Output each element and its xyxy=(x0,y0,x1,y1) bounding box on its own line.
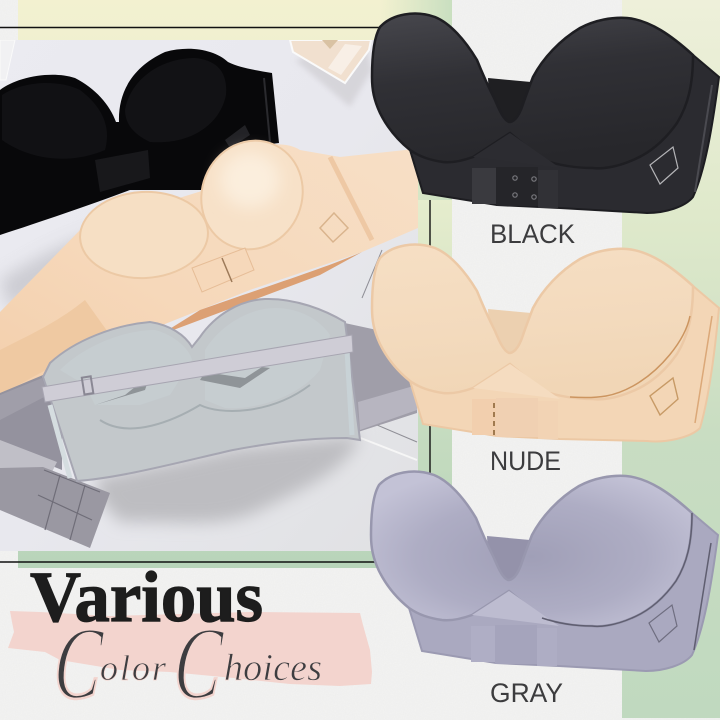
shadow under gray bra xyxy=(95,435,360,523)
panel: gradient block behind the photo xyxy=(18,0,452,568)
subtitle: Color Choices: olor xyxy=(100,648,167,688)
subtitle: Color Choices xyxy=(50,607,322,720)
clear strap xyxy=(42,335,353,402)
logo mark xyxy=(650,378,678,415)
label: BLACK: BLACK xyxy=(490,219,575,249)
black bra xyxy=(0,49,279,235)
pink brush stroke xyxy=(8,611,372,686)
label: NUDE: NUDE xyxy=(490,446,561,476)
frame: thin black rule xyxy=(0,28,430,562)
title: Various: Various xyxy=(30,557,263,637)
product: nude bra xyxy=(372,245,719,441)
logo on nude bra xyxy=(320,213,348,242)
shadow under nude bra xyxy=(0,236,73,305)
logo mark xyxy=(650,147,678,184)
product: gray bra xyxy=(371,472,718,671)
photo: flat lay of three bras xyxy=(0,40,418,551)
subtitle: Color Choices: hoices xyxy=(224,647,322,689)
gray bra xyxy=(0,299,417,548)
subtitle: Color Choices: C xyxy=(50,607,107,720)
product: black bra xyxy=(372,14,719,213)
thin lines on table xyxy=(358,250,417,460)
perfume bottle xyxy=(290,40,372,107)
subtitle: Color Choices: C xyxy=(170,607,227,720)
glass sheet at the left edge xyxy=(0,40,15,80)
nude bra xyxy=(0,125,418,395)
panel: right gradient strip xyxy=(622,0,720,718)
logo mark xyxy=(649,605,677,642)
label: GRAY: GRAY xyxy=(490,678,563,708)
